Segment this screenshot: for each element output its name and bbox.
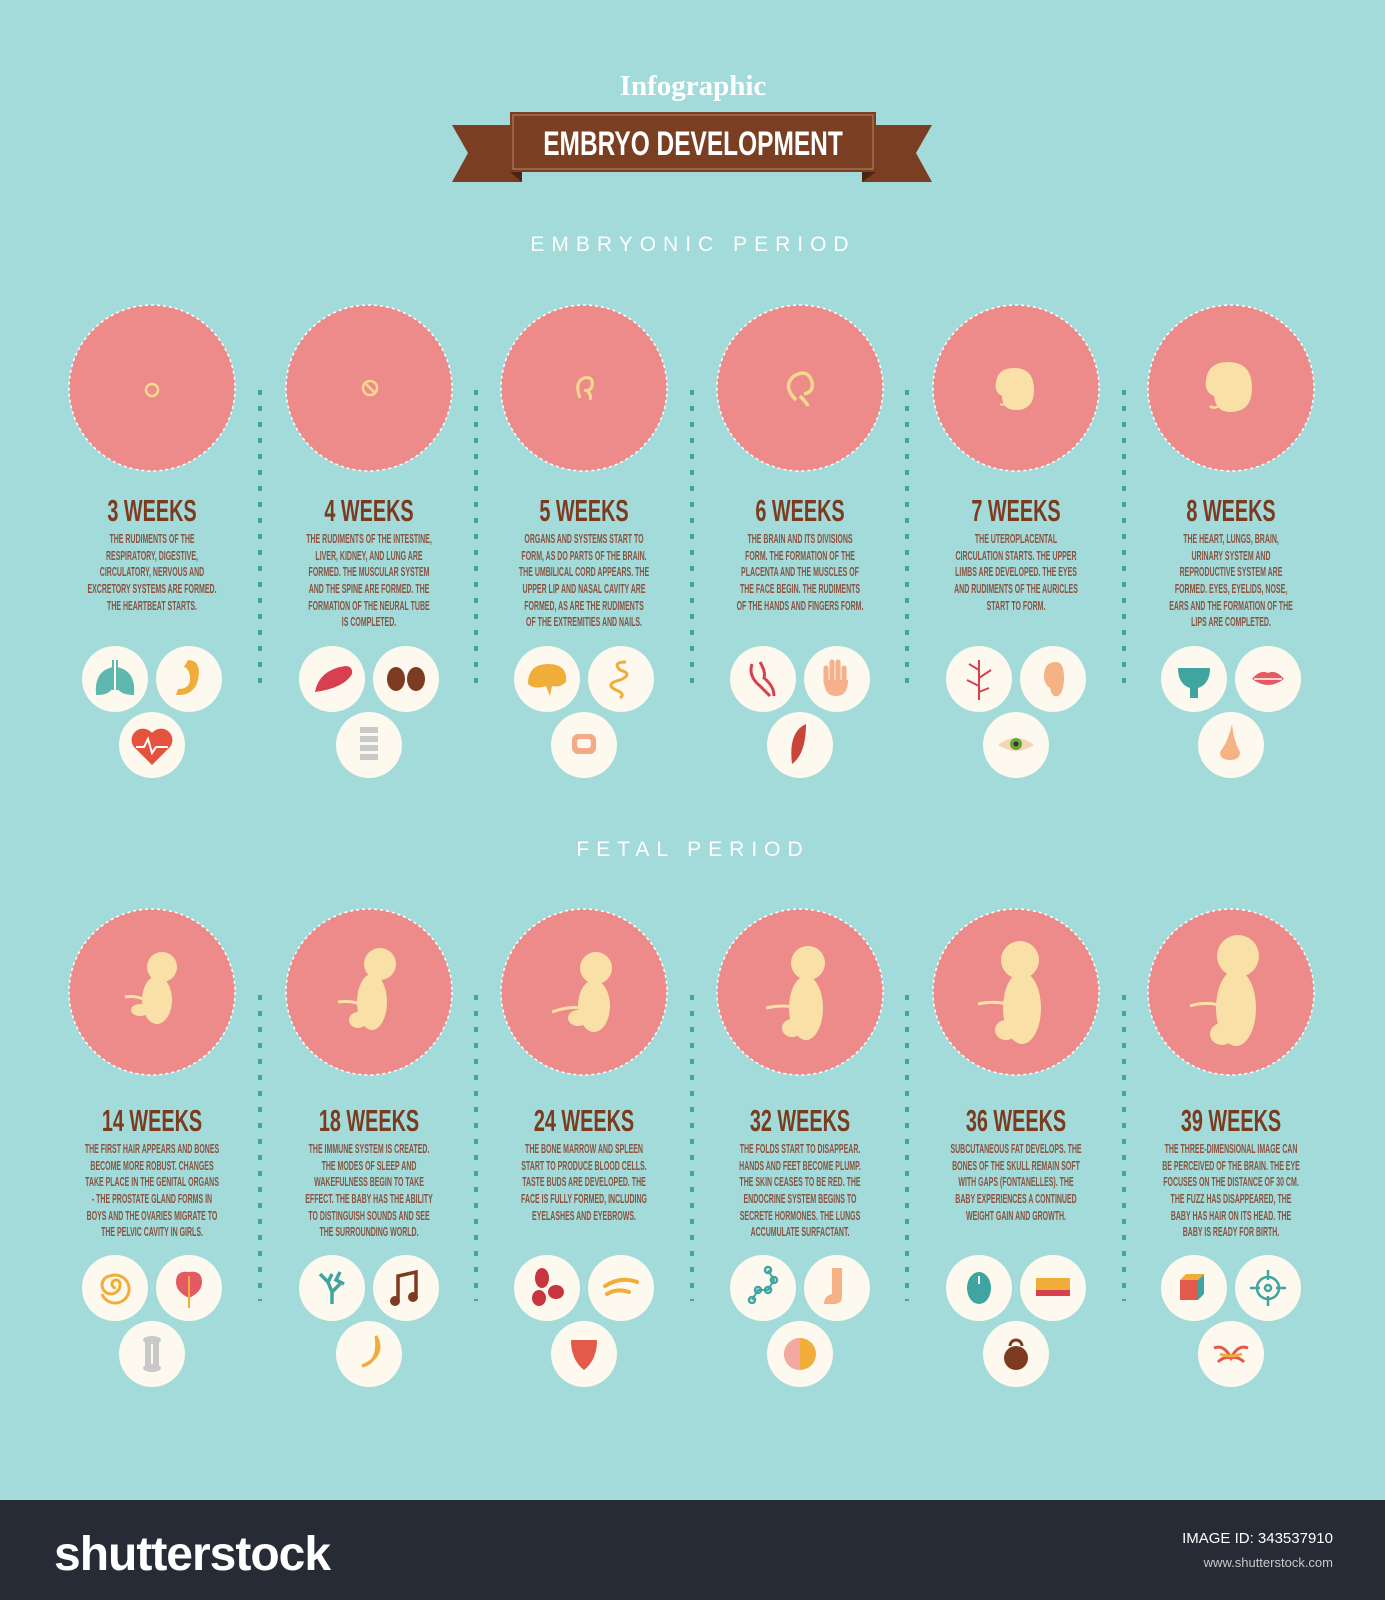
footer bar [0,1500,1385,1600]
panel: 18 weeks: WAKEFULNESS BEGIN TO TAKE [314,1176,424,1190]
panel: 39 weeks: THE THREE-DIMENSIONAL IMAGE CAN [1165,1143,1297,1157]
panel: 3 weeks: THE RUDIMENTS OF THE [109,533,195,547]
panel: 6 weeks: THE BRAIN AND ITS DIVISIONS [747,533,853,547]
panel: 8 weeks: EARS AND THE FORMATION OF THE [1169,600,1293,614]
panel: 5 weeks: ORGANS AND SYSTEMS START TO [524,533,644,547]
banner: EMBRYO DEVELOPMENT [543,125,843,163]
panel: 18 weeks: THE IMMUNE SYSTEM IS CREATED. [309,1143,430,1157]
panel: 8 weeks: LIPS ARE COMPLETED. [1191,616,1271,630]
panel: 24 weeks: START TO PRODUCE BLOOD CELLS. [521,1160,647,1174]
footer bar: shutterstock [54,1528,331,1581]
panel: 5 weeks: THE UMBILICAL CORD APPEARS. THE [519,566,649,580]
panel: 14 weeks: TAKE PLACE IN THE GENITAL ORGANS [85,1176,219,1190]
panel: 32 weeks: SECRETE HORMONES. THE LUNGS [740,1210,860,1224]
panel: 4 weeks: THE RUDIMENTS OF THE INTESTINE, [306,533,432,547]
panel: 24 weeks: TASTE BUDS ARE DEVELOPED. THE [522,1176,646,1190]
panel: 5 weeks [501,305,667,778]
panel: 7 weeks: AND RUDIMENTS OF THE AURICLES [954,583,1078,597]
panel: 5 weeks: FORMED, AS ARE THE RUDIMENTS [524,600,644,614]
panel: 8 weeks: URINARY SYSTEM AND [1191,550,1271,564]
panel: 7 weeks: CIRCULATION STARTS. THE UPPER [955,550,1077,564]
panel: 14 weeks: THE FIRST HAIR APPEARS AND BONES [85,1143,219,1157]
panel: 14 weeks: 14 WEEKS [102,1102,202,1138]
panel: 14 weeks [69,909,235,1387]
panel: 7 weeks: START TO FORM. [987,600,1046,614]
panel: 32 weeks [717,909,883,1387]
panel: 5 weeks: FORM, AS DO PARTS OF THE BRAIN. [521,550,647,564]
footer bar: www.shutterstock.com [1203,1555,1333,1570]
panel: 3 weeks: EXCRETORY SYSTEMS ARE FORMED. [87,583,217,597]
panel: 6 weeks: FORM. THE FORMATION OF THE [745,550,855,564]
panel: 4 weeks: FORMATION OF THE NEURAL TUBE [308,600,430,614]
panel: 5 weeks: UPPER LIP AND NASAL CAVITY ARE [523,583,646,597]
panel: 3 weeks: THE HEARTBEAT STARTS. [107,600,197,614]
title: Infographic [620,70,766,102]
panel: 4 weeks: IS COMPLETED. [342,616,396,630]
panel: 32 weeks: HANDS AND FEET BECOME PLUMP. [739,1160,861,1174]
panel: 3 weeks: RESPIRATORY, DIGESTIVE, [106,550,198,564]
panel: 6 weeks: OF THE HANDS AND FINGERS FORM. [737,600,864,614]
panel: 14 weeks: THE PELVIC CAVITY IN GIRLS. [101,1226,203,1240]
panel: 18 weeks: THE MODES OF SLEEP AND [322,1160,416,1174]
panel: 24 weeks: 24 WEEKS [534,1102,634,1138]
panel: 3 weeks [69,305,235,778]
panel: 39 weeks: BABY IS READY FOR BIRTH. [1183,1226,1279,1240]
panel: 8 weeks [1148,305,1314,778]
panel: 4 weeks [286,305,452,778]
panel: 18 weeks: THE SURROUNDING WORLD. [319,1226,419,1240]
panel: 5 weeks: 5 WEEKS [539,492,629,528]
panel: 36 weeks: BABY EXPERIENCES A CONTINUED [955,1193,1077,1207]
panel: 6 weeks: 6 WEEKS [755,492,845,528]
panel: 4 weeks: AND THE SPINE ARE FORMED. THE [309,583,429,597]
panel: 36 weeks: WEIGHT GAIN AND GROWTH. [966,1210,1066,1224]
panel: 39 weeks: THE FUZZ HAS DISAPPEARED, THE [1171,1193,1292,1207]
panel: 39 weeks: BE PERCEIVED OF THE BRAIN. THE EYE [1162,1160,1300,1174]
heading: fetal period: FETAL PERIOD [576,838,810,861]
panel: 32 weeks: ENDOCRINE SYSTEM BEGINS TO [744,1193,857,1207]
footer bar: IMAGE ID: 343537910 [1182,1530,1333,1547]
banner [452,112,932,182]
panel: 3 weeks: CIRCULATORY, NERVOUS AND [100,566,204,580]
panel: 3 weeks: 3 WEEKS [107,492,197,528]
panel: 7 weeks: 7 WEEKS [971,492,1061,528]
panel: 36 weeks: BONES OF THE SKULL REMAIN SOFT [952,1160,1080,1174]
panel: 6 weeks [717,305,883,778]
panel: 32 weeks: 32 WEEKS [750,1102,850,1138]
heading: embryonic period: EMBRYONIC PERIOD [530,233,856,256]
panel: 14 weeks: - THE PROSTATE GLAND FORMS IN [92,1193,212,1207]
panel: 6 weeks: PLACENTA AND THE MUSCLES OF [741,566,859,580]
panel: 14 weeks: BECOME MORE ROBUST. CHANGES [90,1160,214,1174]
panel: 4 weeks: FORMED. THE MUSCULAR SYSTEM [309,566,429,580]
panel: 8 weeks: 8 WEEKS [1186,492,1276,528]
panel: 32 weeks: ACCUMULATE SURFACTANT. [751,1226,850,1240]
panel: 7 weeks: THE UTEROPLACENTAL [975,533,1057,547]
panel: 36 weeks: WITH GAPS (FONTANELLES). THE [958,1176,1074,1190]
panel: 24 weeks: FACE IS FULLY FORMED, INCLUDING [521,1193,647,1207]
panel: 36 weeks: SUBCUTANEOUS FAT DEVELOPS. THE [950,1143,1082,1157]
panel: 39 weeks [1148,909,1314,1387]
panel: 39 weeks: BABY HAS HAIR ON ITS HEAD. THE [1171,1210,1291,1224]
panel: 32 weeks: THE FOLDS START TO DISAPPEAR. [740,1143,860,1157]
panel: 7 weeks: LIMBS ARE DEVELOPED. THE EYES [955,566,1077,580]
panel: 4 weeks: LIVER, KIDNEY, AND LUNG ARE [315,550,423,564]
panel: 18 weeks: TO DISTINGUISH SOUNDS AND SEE [308,1210,430,1224]
panel: 8 weeks: FORMED. EYES, EYELIDS, NOSE, [1175,583,1287,597]
panel: 7 weeks [933,305,1099,778]
panel: 18 weeks: 18 WEEKS [319,1102,419,1138]
panel: 24 weeks: THE BONE MARROW AND SPLEEN [525,1143,643,1157]
panel: 39 weeks: FOCUSES ON THE DISTANCE OF 30 CM. [1163,1176,1299,1190]
panel: 6 weeks: THE FACE BEGIN. THE RUDIMENTS [740,583,860,597]
panel: 18 weeks [286,909,452,1387]
panel: 8 weeks: THE HEART, LUNGS, BRAIN, [1183,533,1279,547]
panel: 14 weeks: BOYS AND THE OVARIES MIGRATE TO [87,1210,217,1224]
panel: 8 weeks: REPRODUCTIVE SYSTEM ARE [1180,566,1283,580]
panel: 4 weeks: 4 WEEKS [324,492,414,528]
panel: 39 weeks: 39 WEEKS [1181,1102,1281,1138]
panel: 32 weeks: THE SKIN CEASES TO BE RED. THE [739,1176,861,1190]
panel: 36 weeks [933,909,1099,1387]
panel: 18 weeks: EFFECT. THE BABY HAS THE ABILITY [305,1193,433,1207]
panel: 5 weeks: OF THE EXTREMITIES AND NAILS. [526,616,642,630]
panel: 24 weeks [501,909,667,1387]
panel: 36 weeks: 36 WEEKS [966,1102,1066,1138]
panel: 24 weeks: EYELASHES AND EYEBROWS. [532,1210,636,1224]
